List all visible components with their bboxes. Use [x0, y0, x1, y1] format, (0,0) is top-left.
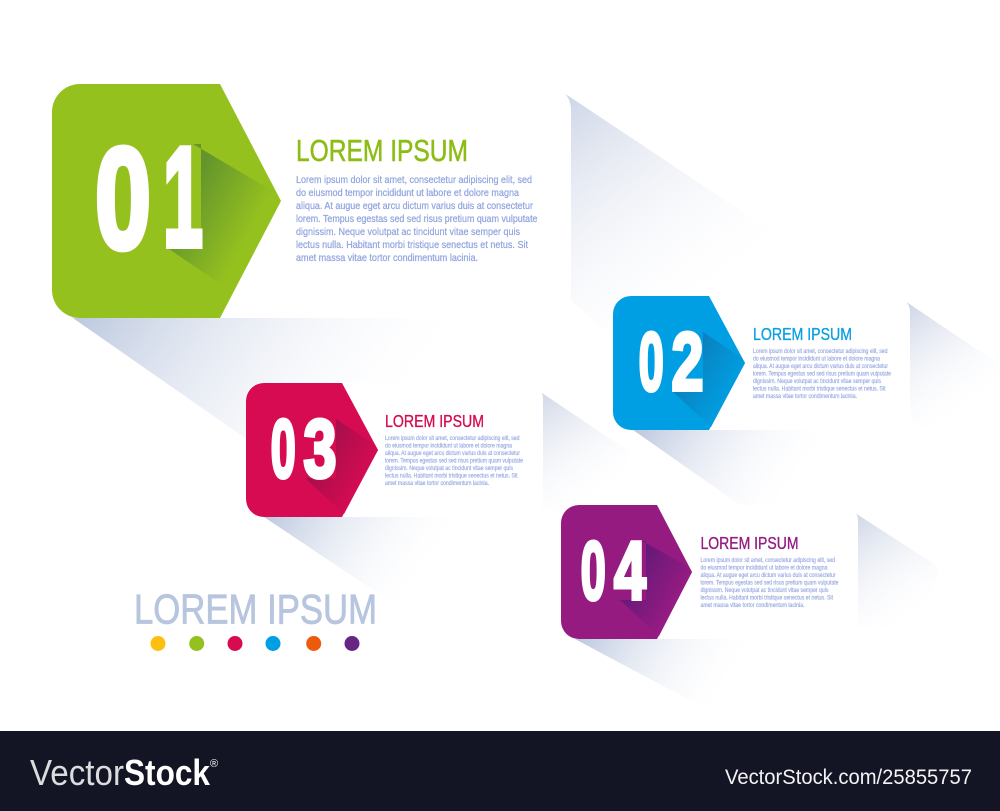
registered mark: ®: [210, 758, 218, 770]
footer logo: Stock: [124, 752, 211, 793]
heading 03: LOREM IPSUM: [385, 411, 484, 431]
colour dots row: [150, 636, 360, 651]
body text 04: lectus nulla. Habitant morbi tristique senectus et netus. Sit: [700, 596, 833, 602]
number 04: 0: [581, 524, 606, 617]
body text 02: lorem. Tempus egestas sed sed risus pretium quam vulputate: [753, 372, 892, 378]
body text 03: lorem. Tempus egestas sed sed risus pretium quam vulputate: [385, 458, 524, 464]
body text 03: do eiusmod tempor incididunt ut labore et dolore magna: [385, 444, 513, 450]
number 01: 1: [163, 118, 203, 277]
footer logo: Vector: [30, 752, 124, 793]
heading 02: LOREM IPSUM: [753, 324, 852, 344]
panel: card 04: [561, 505, 858, 639]
body text 04: Lorem ipsum dolor sit amet, consectetur adipiscing elit, sed: [700, 558, 835, 564]
number shadow 02: [672, 332, 745, 427]
body text 02: Lorem ipsum dolor sit amet, consectetur adipiscing elit, sed: [753, 349, 888, 355]
body text 02: [753, 349, 892, 400]
number shadow 04: [620, 541, 692, 636]
purple arrow tab 04: [561, 505, 692, 639]
number 02: 0: [639, 315, 664, 408]
long shadows behind the cards: [70, 87, 1000, 710]
bottom title: LOREM IPSUM: [134, 586, 377, 632]
body text 01: dignissim. Neque volutpat ac tincidunt vitae semper quis: [296, 226, 520, 238]
body text 01: [296, 174, 538, 264]
number 03: 0: [271, 402, 296, 495]
body text 03: amet massa vitae tortor condimentum lacinia.: [385, 481, 489, 487]
number 04: 4: [614, 524, 646, 617]
body text 04: [700, 558, 839, 609]
number 01: 0: [95, 118, 151, 279]
body text 04: dignissim. Neque volutpat ac tincidunt vitae semper quis: [700, 588, 828, 594]
number 02: 2: [672, 315, 704, 408]
body text 04: aliqua. At augue eget arcu dictum varius duis at consectetur: [700, 573, 836, 579]
body text 02: amet massa vitae tortor condimentum lacinia.: [753, 394, 857, 400]
number shadow 03: [305, 419, 378, 514]
body text 04: amet massa vitae tortor condimentum lacinia.: [700, 603, 805, 609]
body text 03: dignissim. Neque volutpat ac tincidunt vitae semper quis: [385, 466, 513, 472]
body text 02: lectus nulla. Habitant morbi tristique senectus et netus. Sit: [753, 386, 886, 392]
panel: card 03: [246, 383, 543, 517]
heading 01: LOREM IPSUM: [296, 134, 468, 168]
panel: card 01: [52, 84, 571, 318]
body text 01: amet massa vitae tortor condimentum lacinia.: [296, 252, 478, 264]
body text 02: aliqua. At augue eget arcu dictum varius duis at consectetur: [753, 364, 888, 370]
red arrow tab 03: [246, 383, 378, 517]
body text 03: Lorem ipsum dolor sit amet, consectetur adipiscing elit, sed: [385, 436, 520, 442]
body text 01: lorem. Tempus egestas sed sed risus pretium quam vulputate: [296, 213, 538, 225]
number 03: 3: [304, 402, 336, 495]
body text 03: aliqua. At augue eget arcu dictum varius duis at consectetur: [385, 451, 520, 457]
green arrow tab 01: [52, 84, 281, 318]
body text 01: lectus nulla. Habitant morbi tristique senectus et netus. Sit: [296, 239, 528, 251]
body text 01: aliqua. At augue eget arcu dictum varius duis at consectetur: [296, 200, 533, 212]
body text 03: lectus nulla. Habitant morbi tristique senectus et netus. Sit: [385, 474, 518, 480]
body text 02: dignissim. Neque volutpat ac tincidunt vitae semper quis: [753, 379, 881, 385]
footer bar: [0, 731, 1000, 811]
body text 04: lorem. Tempus egestas sed sed risus pretium quam vulputate: [700, 580, 839, 586]
body text 02: do eiusmod tempor incididunt ut labore et dolore magna: [753, 356, 881, 362]
blue arrow tab 02: [613, 296, 745, 430]
heading 04: LOREM IPSUM: [700, 533, 798, 553]
footer logo: [30, 752, 211, 793]
body text 03: [385, 436, 524, 487]
panel: card 02: [613, 296, 910, 430]
body text 04: do eiusmod tempor incididunt ut labore et dolore magna: [700, 566, 828, 572]
number shadow 01: [169, 144, 280, 290]
footer image id: VectorStock.com/25855757: [725, 766, 972, 789]
body text 01: Lorem ipsum dolor sit amet, consectetur adipiscing elit, sed: [296, 174, 532, 186]
body text 01: do eiusmod tempor incididunt ut labore et dolore magna: [296, 187, 519, 199]
